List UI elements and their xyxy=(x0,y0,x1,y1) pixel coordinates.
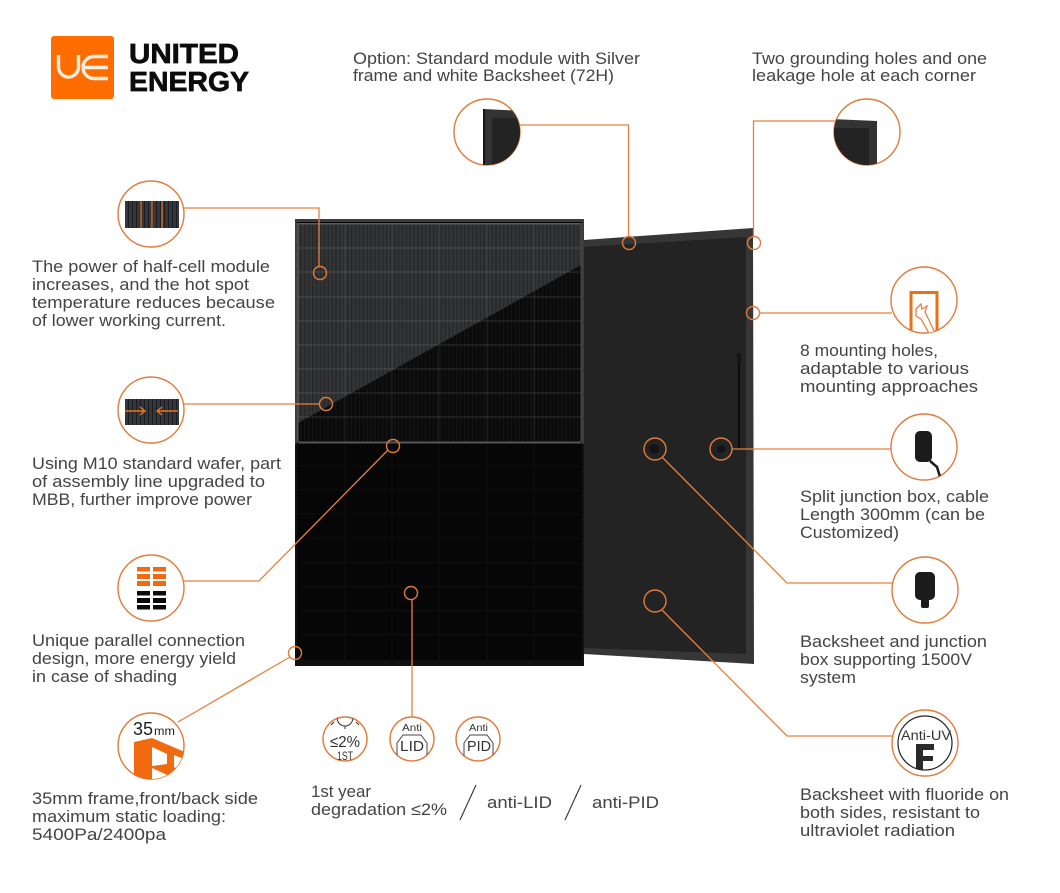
heading: silver frame option: Option: Standard module with Silver xyxy=(353,50,641,68)
text: half-cell module: increases, and the hot spot xyxy=(32,276,249,294)
text: parallel connection: in case of shading xyxy=(32,668,177,686)
callout markers on the panels xyxy=(288,236,760,660)
icon: anti-UV fluoride: Anti-UV xyxy=(901,728,951,743)
icon: anti-LID: Anti xyxy=(402,722,422,734)
text: parallel connection xyxy=(32,632,245,686)
solar panel rear view xyxy=(584,228,754,664)
icon: 35mm frame xyxy=(117,712,185,780)
text: split junction box: Customized) xyxy=(800,524,899,542)
icon: half-cell module xyxy=(118,181,184,247)
icon: M10 wafer xyxy=(118,377,184,443)
icon: anti-PID xyxy=(456,717,500,761)
text: M10 wafer xyxy=(32,455,281,509)
icon: 35mm frame: mm xyxy=(154,724,175,738)
logo: United Energy xyxy=(51,36,249,99)
text: split junction box: Split junction box, cable xyxy=(800,488,989,506)
text: parallel connection: design, more energy yield xyxy=(32,650,236,668)
icon: 1st year degradation xyxy=(323,717,367,763)
text: half-cell module xyxy=(32,258,275,330)
text: degradation and anti-LID / anti-PID: anti-LID xyxy=(487,794,552,812)
icon: anti-PID: PID xyxy=(467,738,491,755)
icon: 1st year degradation: 1ST xyxy=(337,749,353,763)
text: fluoride backsheet: both sides, resistant to xyxy=(800,804,980,822)
text: M10 wafer: MBB, further improve power xyxy=(32,491,253,509)
text: mounting holes: 8 mounting holes, xyxy=(800,342,938,360)
icon: frame corner left xyxy=(454,99,526,170)
icon: 35mm frame: 35 xyxy=(133,719,153,739)
text: degradation and anti-LID / anti-PID: degradation ≤2% xyxy=(311,801,447,819)
text: split junction box: Length 300mm (can be xyxy=(800,506,985,524)
text: degradation and anti-LID / anti-PID: anti-PID xyxy=(592,794,659,812)
icon: frame corner right xyxy=(830,99,900,170)
text: degradation and anti-LID / anti-PID: 1st year xyxy=(311,783,372,801)
text: fluoride backsheet: ultraviolet radiation xyxy=(800,822,955,840)
icon: anti-LID: LID xyxy=(400,738,424,755)
text: backsheet 1500V: box supporting 1500V xyxy=(800,651,972,669)
text: mounting holes: adaptable to various xyxy=(800,360,969,378)
text: fluoride backsheet: Backsheet with fluoride on xyxy=(800,786,1009,804)
callout leader lines xyxy=(178,121,892,736)
text: M10 wafer: Using M10 standard wafer, part xyxy=(32,455,281,473)
text: M10 wafer: of assembly line upgraded to xyxy=(32,473,265,491)
solar panel front view xyxy=(295,219,584,666)
text: half-cell module: The power of half-cell module xyxy=(32,258,270,276)
text: 35mm frame: maximum static loading: xyxy=(32,808,226,826)
icon: anti-LID xyxy=(390,717,434,761)
text: backsheet 1500V: Backsheet and junction xyxy=(800,633,987,651)
text: degradation and anti-LID / anti-PID xyxy=(311,783,659,820)
heading: silver frame option xyxy=(353,50,641,85)
text: split junction box xyxy=(800,488,989,542)
text: 35mm frame: 5400Pa/2400pa xyxy=(32,826,167,844)
heading: silver frame option: frame and white Backsheet (72H) xyxy=(353,67,614,85)
logo: United Energy: ENERGY xyxy=(129,66,249,97)
text: backsheet 1500V: system xyxy=(800,669,856,687)
icon: anti-PID: Anti xyxy=(469,722,488,734)
text: half-cell module: of lower working current. xyxy=(32,312,226,330)
logo: United Energy: UNITED xyxy=(129,38,239,69)
text: 35mm frame xyxy=(32,790,258,844)
icon: anti-UV fluoride xyxy=(892,710,958,776)
icon: split junction box xyxy=(891,414,957,480)
icon: parallel connection xyxy=(118,555,184,621)
heading: grounding holes: leakage hole at each corner xyxy=(752,67,977,85)
text: 35mm frame: 35mm frame,front/back side xyxy=(32,790,258,808)
text: parallel connection: Unique parallel connection xyxy=(32,632,245,650)
text: mounting holes: mounting approaches xyxy=(800,378,978,396)
icon: junction box xyxy=(892,557,958,623)
icon: 1st year degradation: ≤2% xyxy=(330,734,360,751)
text: half-cell module: temperature reduces because xyxy=(32,294,275,312)
heading: grounding holes xyxy=(752,50,987,85)
text: mounting holes xyxy=(800,342,978,396)
text: backsheet 1500V xyxy=(800,633,987,687)
icon: mounting holes wrench xyxy=(891,267,957,335)
heading: grounding holes: Two grounding holes and one xyxy=(752,50,987,68)
text: fluoride backsheet xyxy=(800,786,1009,840)
